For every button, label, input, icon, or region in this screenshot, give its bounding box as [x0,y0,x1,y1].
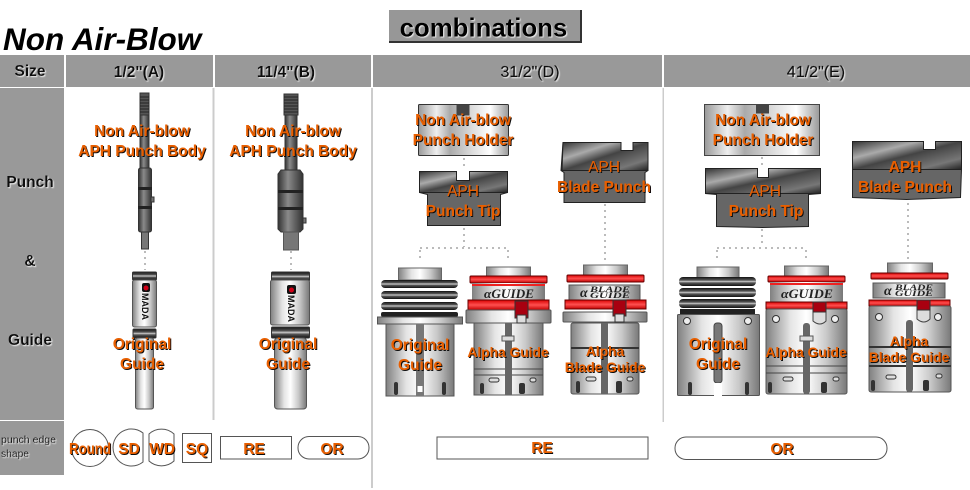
labels for E: Alpha [890,334,928,349]
labels for E: Non Air-blow [715,112,812,129]
alpha blade guide E: BLADE [894,283,933,292]
guide B: MADA [286,295,296,322]
labels for A and B: Non Air-blow [94,123,191,140]
labels for D: Original [391,337,449,354]
labels for D: Punch Tip [426,203,500,220]
labels for E [689,112,952,373]
labels for E: APH [889,159,921,176]
labels for A and B: Original [113,336,171,353]
labels for E: Original [689,336,747,353]
header row: Size [14,63,46,80]
guide B [270,272,310,409]
punch edge labels: OR [770,441,794,458]
punch tip D [420,172,508,226]
alpha blade guide D: BLADE [589,285,630,294]
alpha blade guide D: α [580,286,588,301]
labels for A and B [78,123,357,373]
labels for D: Blade Punch [557,179,651,196]
punch edge labels: Round [69,441,111,458]
punch holder E [704,104,820,156]
blade punch D [561,142,648,202]
punch tip E [706,168,820,228]
punch edge shapes [72,429,887,466]
header row: 31/2"(D) [500,64,560,81]
title: Non Air-Blow [3,21,204,57]
combinations heading: combinations [400,14,567,42]
punch edge labels: RE [531,440,553,457]
alpha blade guide E [869,263,951,392]
labels for A and B: Guide [266,356,310,373]
labels for E: Punch Tip [729,203,803,220]
labels for A and B: Non Air-blow [245,123,342,140]
punch edge labels: SQ [186,441,208,458]
left column: punch edge shape [0,421,64,475]
header row [0,55,970,87]
labels for D: Guide [398,357,442,374]
labels for D: Alpha Guide [467,345,549,360]
left column: Punch and Guide [0,88,64,420]
blade punch E [852,142,962,200]
alpha guide E: αGUIDE [781,286,833,301]
punch edge labels: RE [243,441,265,458]
labels for E: Alpha Guide [765,345,847,360]
labels for D: APH [447,183,479,200]
alpha guide D [466,267,551,395]
labels for A and B: APH Punch Body [78,143,206,160]
labels for D: Punch Holder [413,132,513,149]
original guide E [678,267,760,396]
left column: punch edge shape: shape [1,449,29,460]
labels for D: Blade Guide [565,360,646,375]
punch A [138,93,154,249]
alpha blade guide D: GUIDE [590,291,630,300]
labels for E: APH [749,183,781,200]
guide A [132,272,156,409]
labels for E: Guide [696,356,740,373]
left column: Punch and Guide: Punch [6,174,54,191]
labels for D: Alpha [586,344,624,359]
labels for D: Non Air-blow [415,112,512,129]
labels for E: Punch Holder [713,132,813,149]
labels for A and B: APH Punch Body [229,143,357,160]
punch edge labels [69,440,794,458]
left column: Punch and Guide: & [24,253,36,270]
labels for E: Blade Punch [858,179,952,196]
original guide D [378,268,462,396]
header row: 1/2"(A) [114,64,164,81]
punch edge labels: SD [118,441,140,458]
left column: punch edge shape: punch edge [1,435,56,446]
header row: 11/4"(B) [257,64,315,81]
header row: 41/2"(E) [787,64,845,81]
alpha guide D: αGUIDE [484,286,534,301]
alpha guide E [766,266,847,394]
guide A: MADA [140,293,150,320]
labels for D [391,112,651,375]
labels for E: Blade Guide [869,350,950,365]
punch edge labels: WD [149,441,175,458]
alpha blade guide D [563,265,647,394]
punch B [278,94,306,250]
punch holder D [418,104,508,156]
labels for A and B: Original [259,336,317,353]
alpha blade guide E: α [884,284,892,299]
punch edge labels: OR [320,441,344,458]
labels for A and B: Guide [120,356,164,373]
alpha blade guide E: GUIDE [895,289,933,298]
labels for D: APH [588,159,620,176]
left column: Punch and Guide: Guide [8,332,52,349]
